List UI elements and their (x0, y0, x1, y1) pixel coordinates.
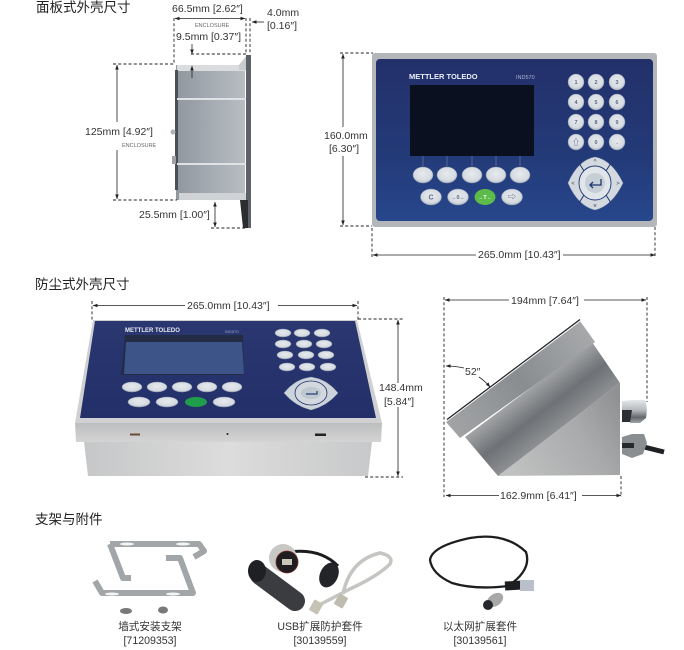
numeric keypad: 1 (574, 80, 578, 86)
Ethernet kit (430, 537, 534, 610)
logo: METTLER TOLEDO (409, 72, 478, 81)
side view dimensions: 4.0mm (267, 7, 299, 19)
wall bracket caption (118, 620, 182, 647)
wall bracket caption: 墙式安装支架 (118, 620, 182, 633)
wedge enclosure dimensions (444, 295, 647, 502)
Ethernet kit caption: 以太网扩展套件 (443, 620, 517, 633)
display screen (121, 335, 244, 375)
function keys: ⇨ (508, 192, 516, 202)
navigation keypad (568, 157, 623, 210)
numeric keypad: 7 (574, 120, 578, 126)
side view dimensions: 125mm [4.92″] (85, 126, 153, 138)
numeric keypad: 6 (615, 100, 619, 106)
navigation keypad: > (616, 181, 620, 187)
heading: brackets and accessories: 支架与附件 (35, 512, 102, 527)
wedge enclosure side photo (446, 320, 664, 476)
numeric keypad: 2 (594, 80, 598, 86)
logo: METTLER TOLEDO (125, 328, 180, 334)
wall mount bracket (95, 542, 204, 614)
front view of panel enclosure (372, 53, 657, 227)
side view dimensions: 25.5mm [1.00″] (139, 209, 210, 221)
desktop enclosure dimensions: [5.84″] (384, 396, 414, 408)
function keys (128, 397, 235, 407)
front view dimensions (324, 53, 655, 261)
navigation keypad: v (593, 203, 597, 209)
numeric keypad: . (616, 140, 618, 146)
side view dimensions: 66.5mm [2.62″] (172, 3, 243, 15)
USB kit caption (277, 620, 363, 647)
Ethernet kit caption: [30139561] (453, 635, 507, 647)
soft keys (122, 382, 242, 392)
desktop enclosure dimensions: 148.4mm (379, 382, 423, 394)
navigation keypad: ^ (593, 159, 597, 165)
model name: IND570 (516, 75, 535, 81)
USB protective kit (248, 544, 391, 615)
screws (120, 608, 132, 614)
navigation keypad: < (571, 181, 575, 187)
front view dimensions: [6.30″] (329, 143, 359, 155)
side view of panel enclosure (170, 55, 251, 228)
front view dimensions: 265.0mm [10.43″] (478, 249, 561, 261)
wedge enclosure dimensions: 162.9mm [6.41″] (500, 490, 577, 502)
heading: panel enclosure dimensions: 面板式外壳尺寸 (36, 0, 130, 15)
wall bracket caption: [71209353] (123, 635, 177, 647)
numeric keypad: 9 (615, 120, 619, 126)
side view dimensions: ENCLOSURE (122, 143, 157, 149)
front view dimensions: 160.0mm (324, 130, 368, 142)
function keys: C (428, 194, 434, 202)
navigation keypad (284, 377, 338, 410)
desktop enclosure dimensions (92, 300, 423, 477)
function keys: →T← (478, 195, 492, 201)
model name: IND570 (225, 329, 239, 334)
side view dimensions: 9.5mm [0.37″] (176, 31, 241, 43)
Ethernet kit caption (443, 620, 517, 647)
numeric keypad: 8 (594, 120, 598, 126)
USB kit caption: USB扩展防护套件 (277, 620, 363, 633)
display screen (410, 85, 534, 156)
desktop enclosure photo (75, 320, 382, 476)
numeric keypad: 0 (594, 140, 598, 146)
wedge enclosure dimensions: 52″ (465, 366, 481, 378)
numeric keypad: 5 (594, 100, 598, 106)
USB kit caption: [30139559] (293, 635, 347, 647)
numeric keypad: 4 (574, 100, 578, 106)
desktop enclosure dimensions: 265.0mm [10.43″] (187, 300, 270, 312)
soft keys (413, 156, 530, 183)
side view dimensions: [0.16″] (267, 20, 297, 32)
side view dimensions (85, 3, 299, 228)
numeric keypad: ⇧ (572, 137, 580, 147)
function keys (420, 189, 522, 205)
numeric keypad: 3 (615, 80, 619, 86)
numeric keypad (275, 329, 336, 371)
side view dimensions: ENCLOSURE (195, 23, 230, 29)
heading: dust-proof enclosure dimensions: 防尘式外壳尺寸 (35, 277, 130, 292)
function keys: →0← (451, 195, 465, 201)
wedge enclosure dimensions: 194mm [7.64″] (511, 295, 579, 307)
numeric keypad (568, 74, 625, 150)
